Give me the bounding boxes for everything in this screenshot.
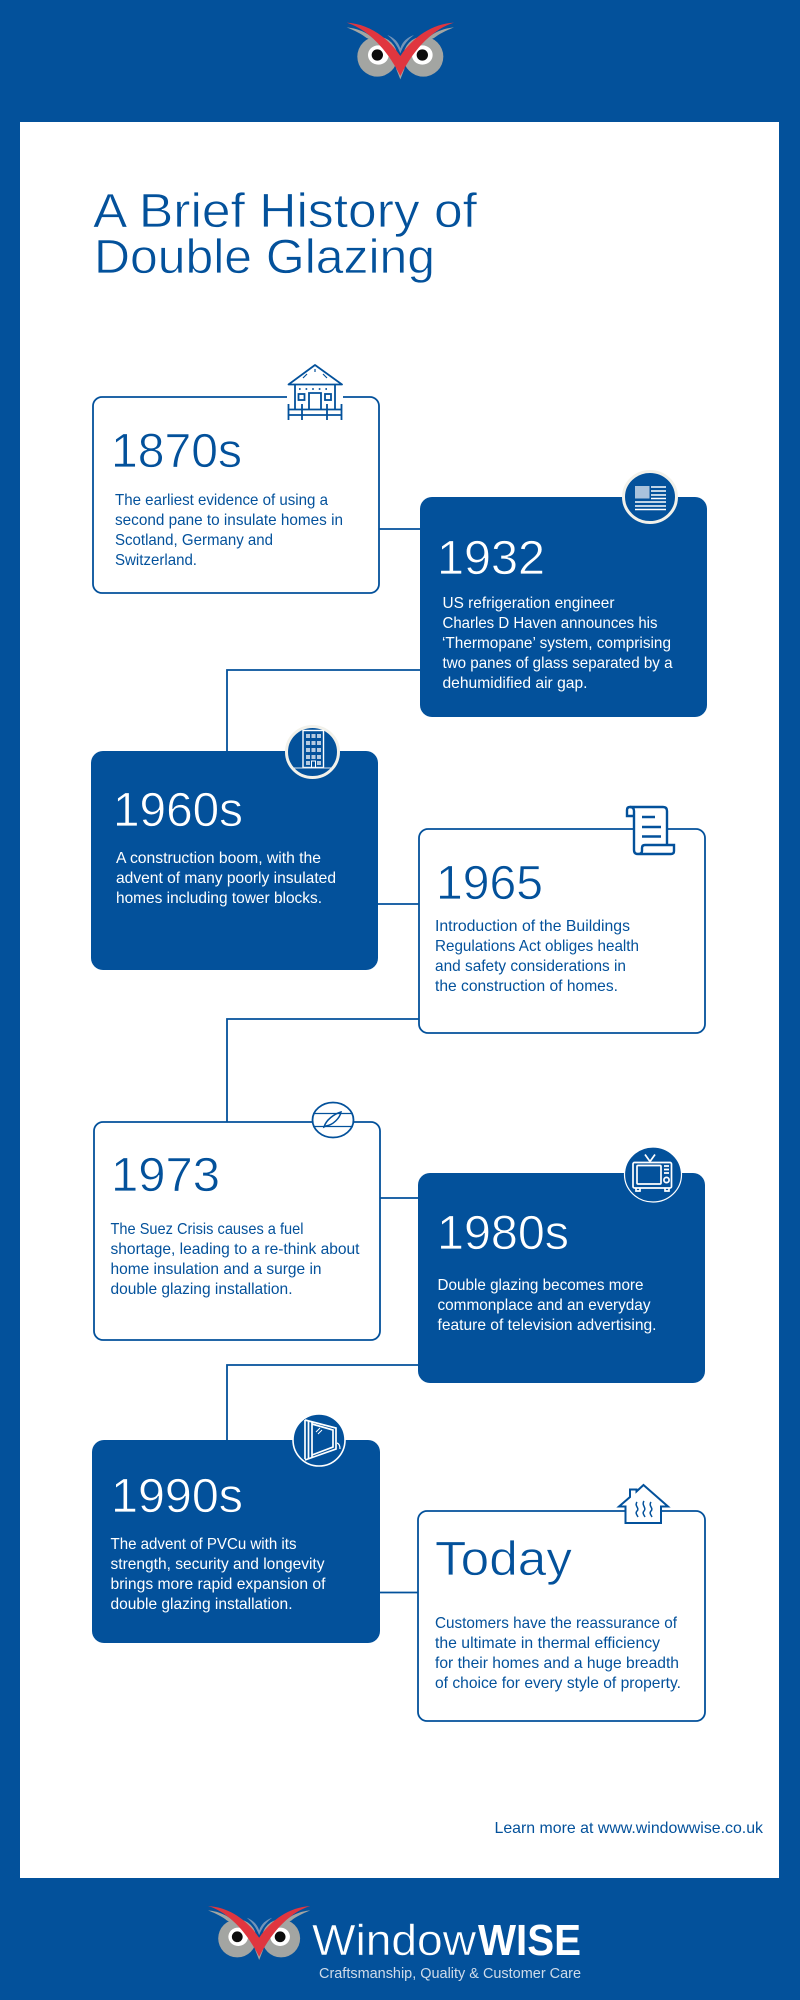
card fill [91,751,378,970]
description: of choice for every style of property. [435,1675,681,1692]
description: home insulation and a surge in [110,1261,322,1278]
icon: american flag in circle [624,472,676,522]
description: The earliest evidence of using a [115,492,328,509]
description: Switzerland. [115,552,197,569]
panel: 1980s [418,1147,705,1383]
description: The advent of PVCu with its [110,1536,296,1553]
year: 1960s [113,784,243,837]
icon: scroll document [627,807,674,854]
description: the construction of homes. [435,978,618,995]
description: ‘Thermopane’ system, comprising [442,635,671,652]
description: Introduction of the Buildings [435,918,630,935]
description [435,918,639,995]
description: two panes of glass separated by a [442,655,673,672]
card fill [420,497,707,717]
description: and safety considerations in [435,958,626,975]
description [116,850,336,907]
brand name: Window [312,1916,476,1965]
description: Charles D Haven announces his [442,615,658,632]
icon: television in circle [624,1147,682,1202]
footer logo [208,1906,581,1982]
header logo: owl [347,23,454,79]
description [435,1615,681,1692]
card fill [92,1440,380,1643]
title [93,185,478,284]
description: feature of television advertising. [438,1317,656,1334]
description [110,1221,360,1298]
icon: open window in circle [293,1414,345,1466]
description: the ultimate in thermal efficiency [435,1635,660,1652]
panel: 1973 [94,1102,380,1340]
card fill [418,1173,705,1383]
description: brings more rapid expansion of [110,1576,326,1593]
year: 1870s [111,425,242,478]
title: Double Glazing [94,231,435,284]
panel: Today [418,1485,705,1721]
description [438,1277,656,1334]
card outline [93,397,379,593]
description: double glazing installation. [110,1596,292,1613]
description: Double glazing becomes more [438,1277,644,1294]
icon: house with fence [287,365,343,422]
icon: suez canal map in circle [312,1102,354,1138]
description: for their homes and a huge breadth [435,1655,679,1672]
description [442,595,673,692]
description: commonplace and an everyday [438,1297,650,1314]
timeline connectors [227,529,420,1592]
description: Scotland, Germany and [115,532,273,549]
card outline [419,829,705,1033]
icon: tower block in circle [286,726,338,778]
description: second pane to insulate homes in [115,512,343,529]
year: 1932 [437,532,545,585]
description: Regulations Act obliges health [435,938,639,955]
description: strength, security and longevity [110,1556,324,1573]
owl emblem [208,1906,310,1960]
description: double glazing installation. [110,1281,292,1298]
brand name [312,1916,581,1965]
description: A construction boom, with the [116,850,321,867]
year: Today [435,1533,572,1586]
description [110,1536,326,1613]
year: 1990s [111,1470,243,1523]
description: Customers have the reassurance of [435,1615,678,1632]
description: dehumidified air gap. [442,675,588,692]
year: 1965 [436,857,543,910]
icon: heated house [619,1485,668,1523]
panel: 1960s [91,726,378,970]
year: 1980s [437,1207,569,1260]
learn more link: Learn more at www.windowwise.co.uk [494,1820,764,1837]
description: shortage, leading to a re-think about [110,1241,360,1258]
card outline [418,1511,705,1721]
panel: 1870s [93,365,379,593]
year: 1973 [111,1149,220,1202]
description: The Suez Crisis causes a fuel [110,1221,304,1238]
tagline: Craftsmanship, Quality & Customer Care [319,1965,581,1982]
description [115,492,343,569]
card outline [94,1122,380,1340]
title: A Brief History of [93,185,478,238]
description: advent of many poorly insulated [116,870,336,887]
description: homes including tower blocks. [116,890,322,907]
description: US refrigeration engineer [442,595,615,612]
brand name: WISE [478,1916,581,1965]
panel: 1932 [420,472,707,717]
panel: 1990s [92,1414,380,1643]
panel: 1965 [419,807,705,1033]
